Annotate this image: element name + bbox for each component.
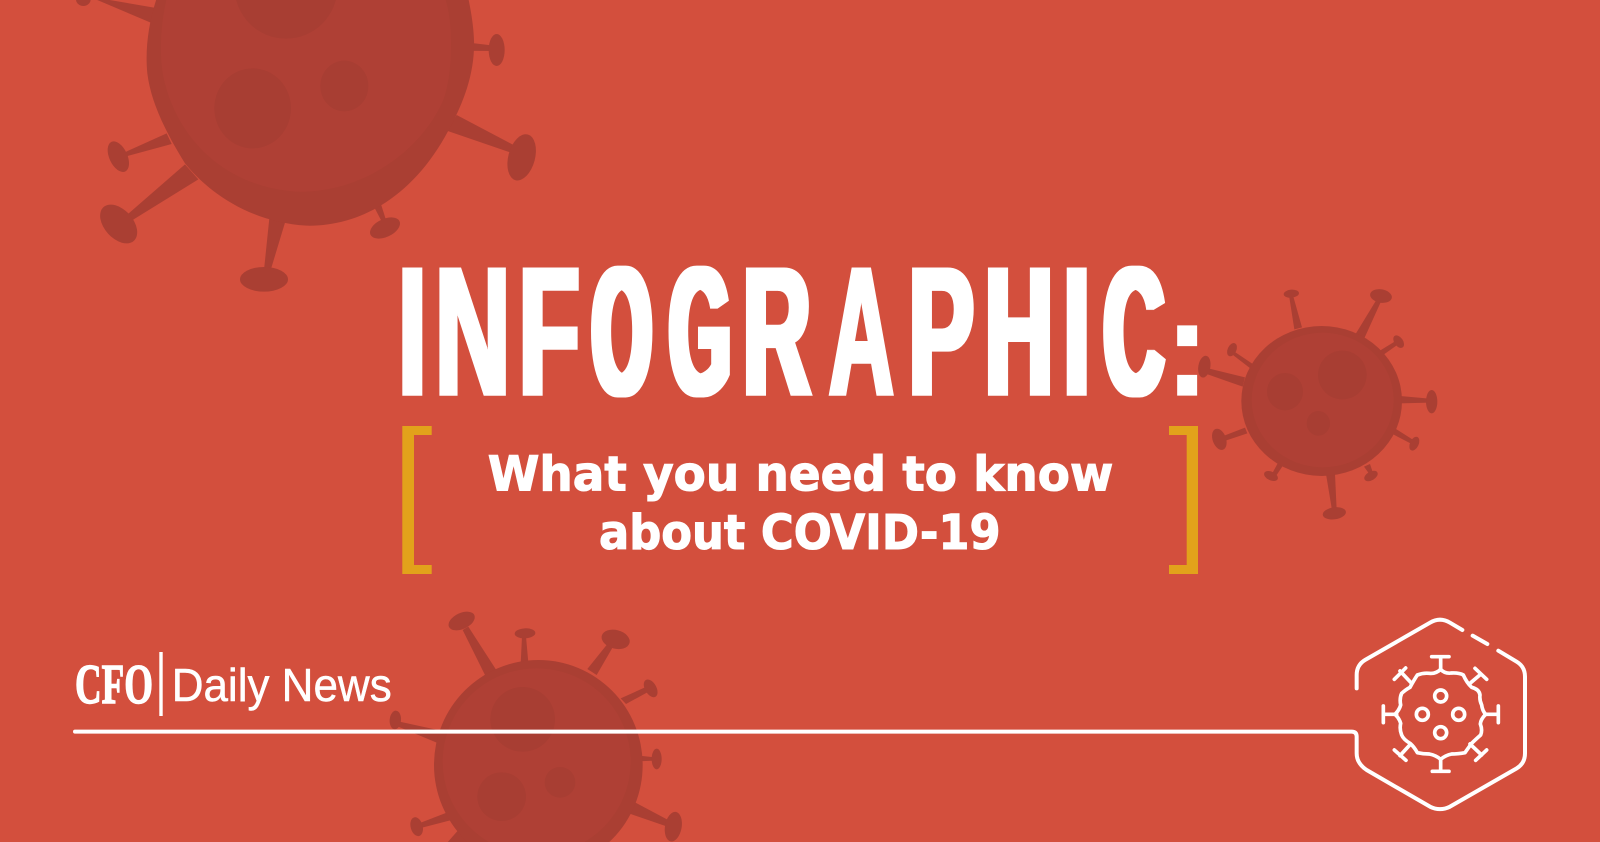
virus: bottom centre (389, 608, 684, 842)
title: INFOGRAPHIC:: A (829, 231, 894, 434)
title: INFOGRAPHIC:: H (985, 230, 1053, 433)
title: INFOGRAPHIC:: C (1104, 229, 1164, 433)
icon: virus in hexagon (1383, 657, 1498, 771)
title: INFOGRAPHIC:: I (395, 231, 430, 434)
title: INFOGRAPHIC:: P (908, 230, 974, 434)
logo: CFO Daily News: CFO (75, 654, 153, 716)
title: INFOGRAPHIC:: G (669, 229, 731, 433)
subtitle (488, 447, 1113, 561)
title: INFOGRAPHIC:: : (1166, 272, 1208, 423)
title: INFOGRAPHIC:: I (1059, 231, 1094, 434)
subtitle: about COVID-19 (599, 505, 1001, 561)
logo: CFO Daily News: Daily News (172, 659, 392, 711)
rule line and hexagon frame (75, 620, 1525, 809)
title: INFOGRAPHIC:: N (435, 231, 511, 433)
title: INFOGRAPHIC:: F (519, 230, 580, 434)
subtitle: What you need to know (488, 447, 1113, 503)
virus: right of title (1197, 288, 1437, 521)
logo: CFO Daily News (75, 652, 392, 716)
title: INFOGRAPHIC: (395, 229, 1208, 434)
title: INFOGRAPHIC:: R (743, 230, 811, 433)
virus: top left (76, 0, 541, 292)
bracket: left (402, 426, 432, 574)
title: INFOGRAPHIC:: O (593, 230, 651, 433)
bracket: right (1169, 426, 1198, 574)
